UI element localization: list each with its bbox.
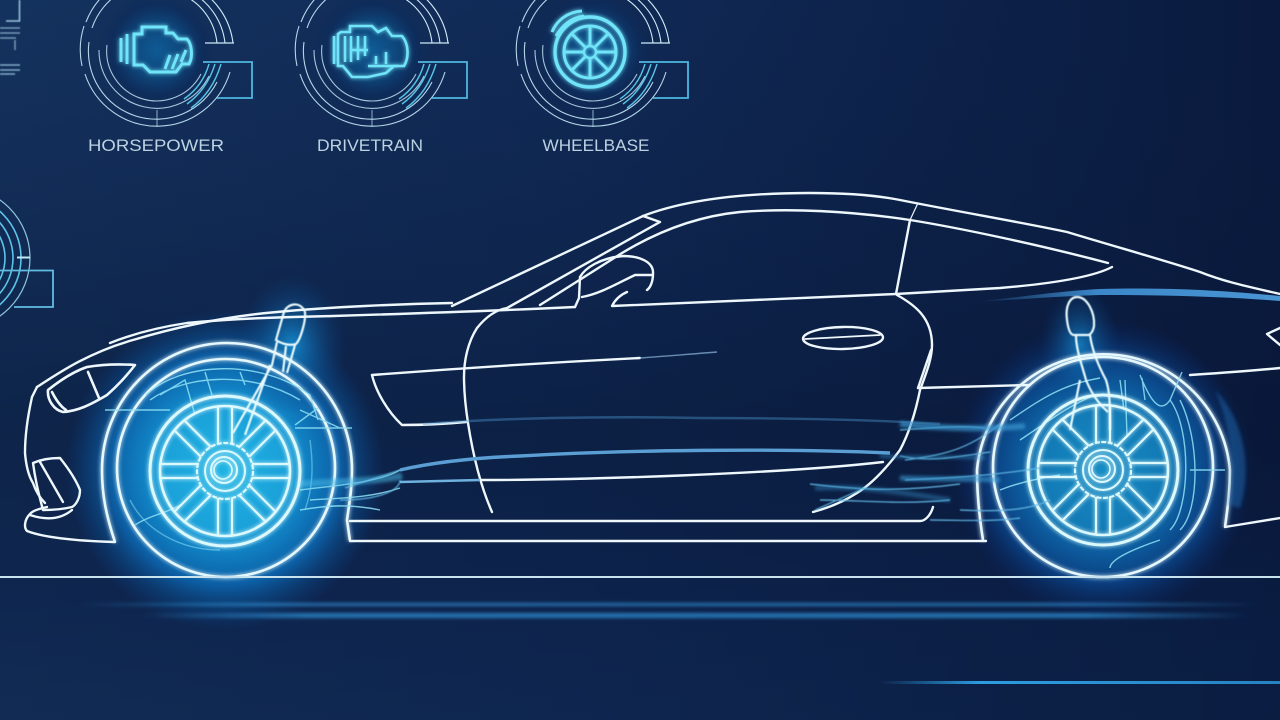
icon: engine [121,27,191,72]
door rear edge [813,295,932,512]
label: drivetrain: DRIVETRAIN [317,136,423,155]
rim [1028,395,1178,545]
tyre [117,359,335,577]
ground line [0,576,1280,578]
metric: drivetrain [295,0,467,155]
suspension strut [233,304,305,435]
glow: front wheel [65,310,385,630]
blue accent lines on the body [400,352,940,482]
sill [350,507,986,541]
metric: horsepower [80,0,252,155]
partial dial at left edge [0,187,53,329]
rear lines [918,368,1280,388]
hub [1075,442,1131,498]
streak glow right of front wheel [298,476,402,484]
fragment of dial at top-left edge [0,0,20,74]
B pillar [896,220,910,294]
headlight [48,364,135,412]
door front edge [464,308,507,512]
glow: front strut [237,275,347,415]
speed streaks [80,603,1280,684]
shoulder line [372,358,640,375]
inner arch details [105,369,400,550]
hood [37,303,452,387]
mirror [575,256,653,307]
rim [150,396,300,546]
front splitter [25,507,115,542]
A pillar [507,216,660,308]
blurred streak glows behind the rear wheel [815,424,1025,500]
glow: rear wheel [953,320,1253,620]
blue fender haze [1215,390,1246,508]
front intake [33,458,80,510]
suspension strut [1067,297,1110,430]
blue speed swoosh [973,288,1280,302]
roofline [452,193,1280,306]
inner arch details [1000,372,1225,568]
tyre [993,357,1213,577]
wheel arch [977,354,1230,540]
metric: wheelbase [516,0,688,155]
icon: wheel [552,11,625,87]
rear wheel [977,297,1246,577]
label: horsepower: HORSEPOWER [88,136,224,155]
lower character line [480,462,883,480]
glow: rear strut [1040,285,1120,405]
hub [197,443,253,499]
spokes [1038,405,1168,535]
car body outline [25,193,1280,542]
label: wheelbase: WHEELBASE [542,136,650,155]
wheel arch [102,343,352,542]
window top [540,210,1108,305]
door handle [803,326,883,350]
spokes [160,406,290,536]
underbody x-ray streaks [340,424,1050,520]
icon: drivetrain engine [334,26,408,77]
front wheel [102,304,402,577]
nose [25,387,45,503]
window bottom [612,267,1112,306]
